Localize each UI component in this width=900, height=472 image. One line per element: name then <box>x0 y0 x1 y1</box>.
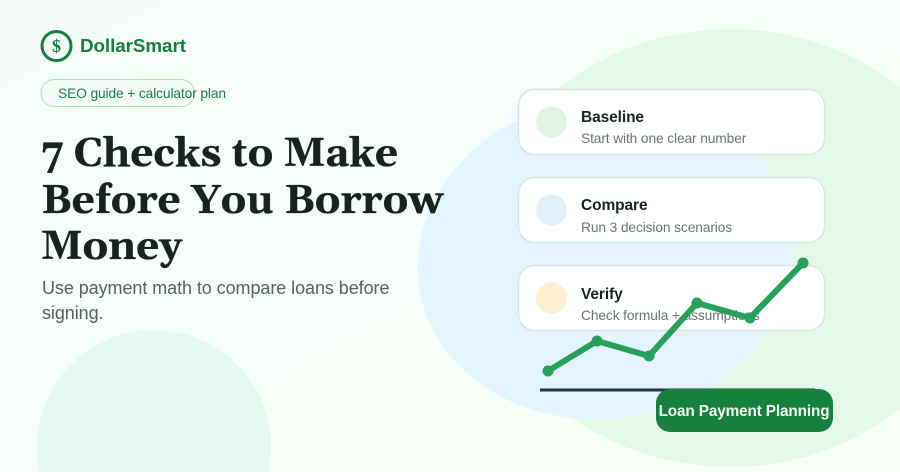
card title: Baseline <box>581 109 644 126</box>
card: compare <box>518 178 824 242</box>
background shape: green blob <box>480 29 900 467</box>
card: baseline <box>518 90 824 154</box>
logo <box>42 32 187 60</box>
chart axis <box>540 388 815 392</box>
card text: Check formula + assumptions <box>581 308 760 323</box>
title: Before You Borrow <box>41 175 444 227</box>
card title: Verify <box>581 286 623 303</box>
subtitle: signing. <box>42 303 103 323</box>
title <box>41 128 444 273</box>
icon: green dot <box>536 106 567 138</box>
subtitle: Use payment math to compare loans before <box>42 278 389 298</box>
line chart <box>542 258 808 376</box>
title: 7 Checks to Make <box>41 128 398 180</box>
card: verify <box>518 266 824 330</box>
badge: SEO guide + calculator plan <box>58 86 226 101</box>
card text: Start with one clear number <box>581 131 747 146</box>
badge <box>41 80 226 106</box>
button label: Loan Payment Planning <box>659 403 829 420</box>
card text: Run 3 decision scenarios <box>581 220 732 235</box>
icon: amber dot <box>536 282 567 314</box>
icon: blue dot <box>536 194 567 226</box>
title: Money <box>41 221 183 273</box>
brand name: DollarSmart <box>80 35 187 56</box>
background shape: blue blob <box>392 68 818 448</box>
background shape: mint circle <box>37 330 271 472</box>
card title: Compare <box>581 197 648 214</box>
icon: dollar coin: $ <box>52 36 61 56</box>
subtitle <box>42 278 389 323</box>
icon: dollar coin <box>42 32 71 60</box>
button label <box>656 389 833 432</box>
